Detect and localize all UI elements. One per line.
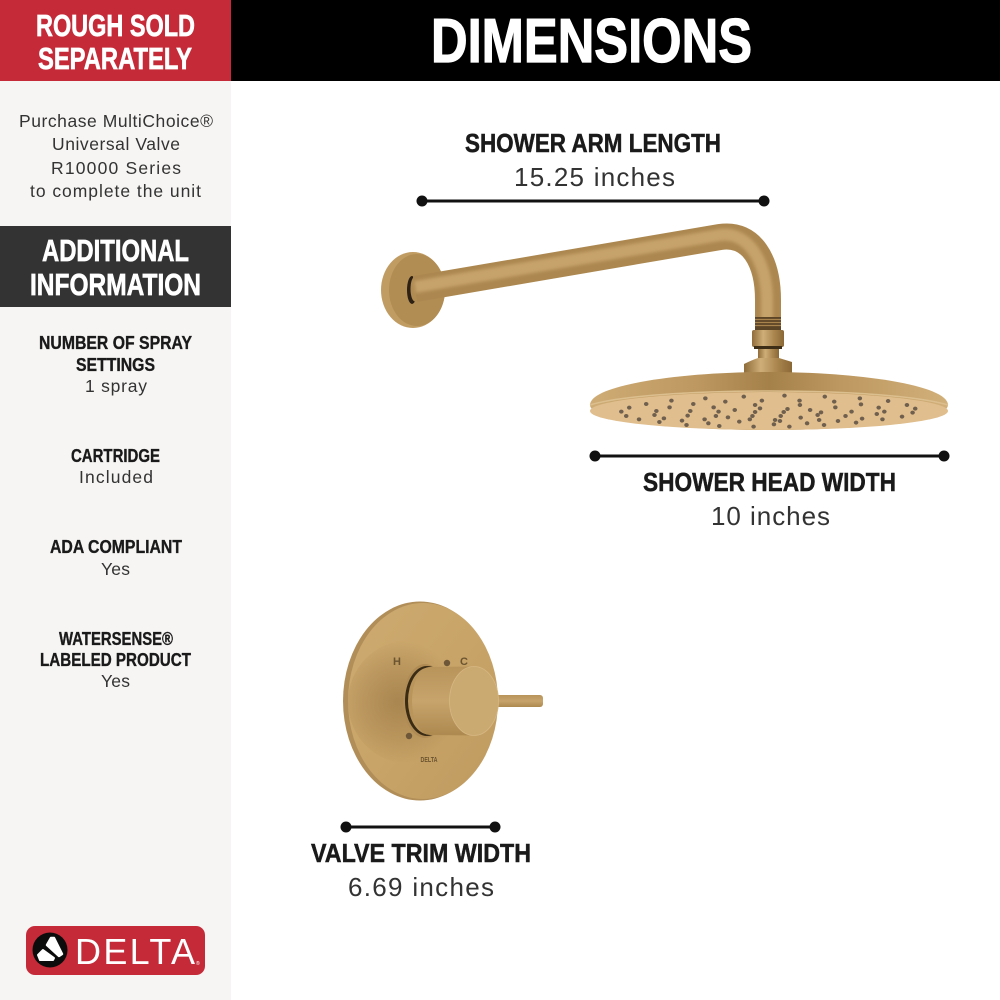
lever — [495, 695, 543, 707]
dimension: shower head width: 10 inches — [711, 501, 830, 531]
shower arm — [415, 235, 768, 322]
info item: cartridge: Included — [79, 467, 153, 487]
info item: cartridge: CARTRIDGE — [71, 446, 160, 466]
info item: watersense: WATERSENSE® — [59, 629, 173, 649]
info item: watersense — [40, 629, 191, 691]
text block: purchase note: to complete the unit — [30, 181, 201, 201]
header bar: dimensions — [231, 0, 1000, 81]
dimension: valve trim width — [311, 822, 531, 902]
plate markings: C — [460, 656, 468, 668]
info item: ada compliant: Yes — [101, 559, 130, 579]
banner: rough sold separately: SEPARATELY — [38, 41, 192, 76]
info item: cartridge — [71, 446, 160, 487]
info item: spray settings: NUMBER OF SPRAY — [39, 333, 192, 353]
info item: ada compliant: ADA COMPLIANT — [50, 537, 182, 557]
dimension: shower head width: SHOWER HEAD WIDTH — [643, 467, 896, 497]
logo: delta — [26, 926, 205, 975]
logo: delta: ® — [196, 960, 200, 967]
dimension: shower arm length: SHOWER ARM LENGTH — [465, 128, 721, 158]
shower head — [590, 372, 948, 430]
dimension: shower arm length — [416, 128, 770, 206]
threaded connector — [744, 317, 792, 373]
spray nozzles — [619, 394, 917, 429]
text block: purchase note: Purchase MultiChoice® — [19, 111, 213, 131]
info item: watersense: Yes — [101, 671, 130, 691]
logo: delta: DELTA — [75, 931, 195, 972]
illustration: shower arm and head — [381, 235, 948, 430]
dimension: shower head width — [590, 450, 950, 531]
banner: additional information — [0, 226, 231, 307]
wall flange — [381, 252, 445, 328]
handle — [403, 664, 498, 738]
dimension: shower arm length: 15.25 inches — [514, 162, 675, 192]
text block: purchase note: Universal Valve — [52, 134, 180, 154]
illustration: valve trim — [343, 602, 543, 800]
plate markings: DELTA — [420, 757, 438, 764]
text block: purchase note: R10000 Series — [51, 158, 181, 178]
dimension: valve trim width: 6.69 inches — [348, 872, 494, 902]
banner: additional information: INFORMATION — [30, 267, 201, 302]
plate markings: H — [393, 656, 401, 668]
trim plate — [343, 602, 498, 800]
dimension: valve trim width: VALVE TRIM WIDTH — [311, 838, 531, 868]
info item: spray settings — [39, 333, 192, 396]
banner: rough sold separately: ROUGH SOLD — [36, 8, 195, 43]
header bar: dimensions: DIMENSIONS — [431, 7, 752, 76]
text block: purchase note — [19, 111, 213, 201]
info item: watersense: LABELED PRODUCT — [40, 650, 191, 670]
plate markings — [393, 656, 468, 764]
info item: spray settings: SETTINGS — [76, 355, 155, 375]
banner: rough sold separately — [0, 0, 231, 81]
panel: left sidebar — [0, 0, 231, 1000]
info item: ada compliant — [50, 537, 182, 579]
info item: spray settings: 1 spray — [85, 376, 147, 396]
banner: additional information: ADDITIONAL — [42, 233, 189, 268]
